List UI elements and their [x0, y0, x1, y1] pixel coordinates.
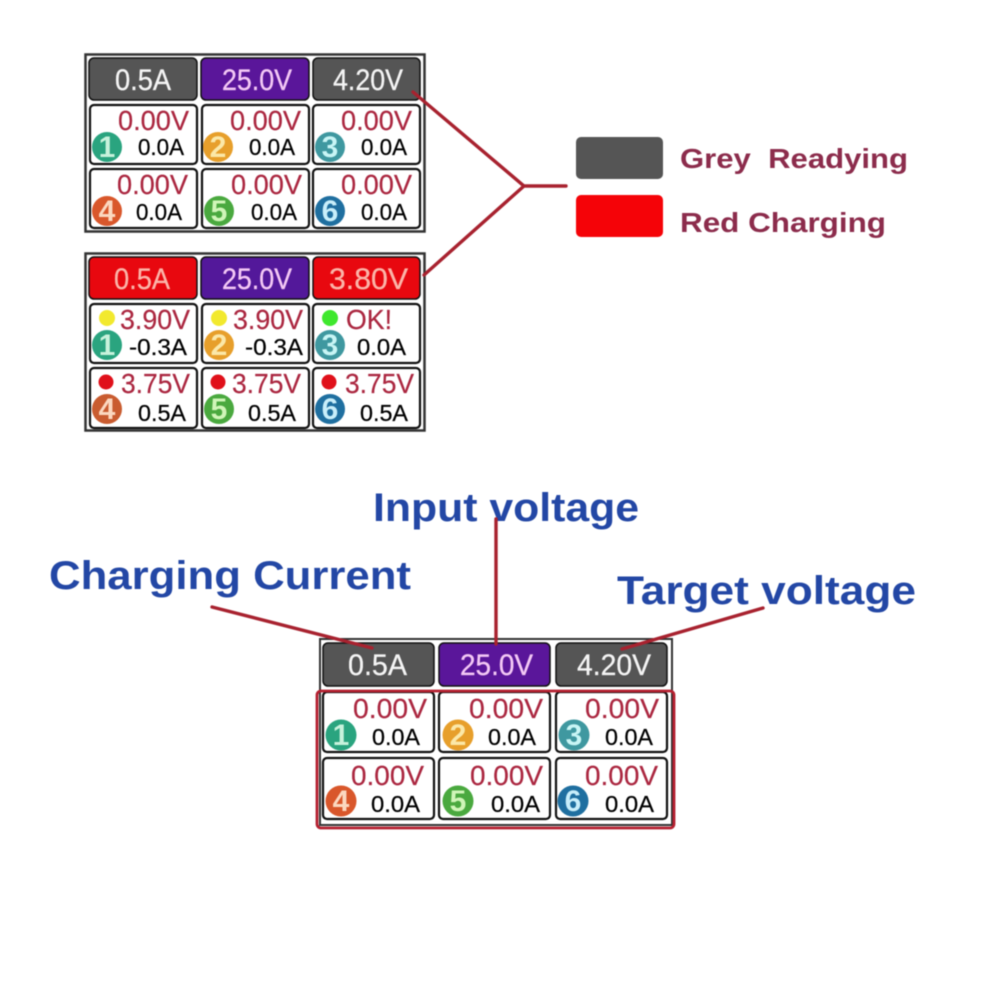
readout: battery voltage, red [313, 257, 420, 299]
readout: input voltage, purple: 25.0V [222, 263, 292, 296]
channel 1: 0.00V [353, 693, 428, 724]
arrow: bracket from both displays to legend [413, 92, 566, 275]
channel 6, red status [313, 368, 420, 428]
channel 3, green status [313, 304, 420, 363]
channel 1 [90, 105, 197, 164]
channel 3: 3 [322, 131, 338, 164]
readout: input voltage: 25.0V [460, 649, 533, 682]
channel 5, red status: 5 [211, 393, 227, 426]
channel 4, red status: 0.5A [138, 400, 186, 426]
readout: charging current, red [89, 257, 197, 299]
channel 6 [556, 758, 667, 819]
readout: charging current [89, 58, 197, 100]
readout: input voltage: 25.0V [222, 64, 292, 97]
channel 4: 4 [99, 195, 116, 228]
channel 2, yellow status: -0.3A [245, 334, 303, 360]
channel 6: 6 [565, 785, 581, 818]
channel 3, green status: 0.0A [357, 334, 406, 360]
panel: charging display [86, 254, 424, 430]
channel 5: 0.0A [251, 199, 297, 225]
readout: charging current: 0.5A [348, 649, 407, 682]
channel 5, red status: 0.5A [248, 400, 296, 426]
legend label: grey readying: Grey Readying [680, 143, 908, 174]
channel 3: 0.0A [605, 724, 653, 750]
readout: input voltage [201, 58, 309, 100]
channel 3 [556, 692, 667, 752]
readout: charging current: 0.5A [115, 64, 171, 97]
heading: target voltage: Target voltage [617, 569, 916, 613]
channel 2: 0.0A [488, 724, 536, 750]
channel 3, green status: OK! [346, 304, 392, 335]
channel 6, red status: 3.75V [345, 368, 415, 399]
arrow: charging current pointer [212, 607, 372, 648]
channel 6: 0.0A [605, 791, 654, 817]
channel 4 [90, 169, 197, 228]
channel 1 [323, 692, 434, 752]
channel 3: 3 [566, 719, 582, 752]
channel 6, red status: 0.5A [360, 400, 408, 426]
channel 6 [313, 169, 420, 228]
readout: input voltage, purple [201, 257, 309, 299]
channel 1: 1 [333, 719, 349, 752]
readout: target voltage [313, 58, 420, 100]
legend label: red charging: Red Charging [680, 207, 886, 238]
legend [576, 137, 908, 238]
legend swatch: grey [576, 137, 663, 179]
channel 5: 0.0A [491, 791, 540, 817]
channel 4: 0.0A [371, 791, 420, 817]
heading: input voltage: Input voltage [373, 486, 639, 530]
channel 6, red status: 6 [322, 393, 338, 426]
channel 5, red status [202, 368, 309, 428]
channel 5 [439, 758, 550, 819]
readout: charging current [323, 643, 434, 686]
channel 5: 5 [211, 195, 227, 228]
channel 3, green status: 3 [322, 329, 338, 362]
channel 3: 0.0A [361, 134, 407, 160]
channel 4, red status: 3.75V [121, 368, 191, 399]
legend swatch: red [576, 195, 663, 237]
channel 3: 0.00V [585, 693, 660, 724]
channel 2, yellow status [202, 304, 309, 363]
channel 4: 0.00V [117, 169, 189, 200]
panel: readying display [86, 54, 424, 232]
arrow: input voltage pointer [494, 519, 498, 644]
channel 1: 0.00V [118, 105, 190, 136]
channel 2 [202, 105, 309, 164]
channel 6: 0.00V [341, 169, 413, 200]
readout: charging current, red: 0.5A [114, 263, 170, 296]
readout: battery voltage, red: 3.80V [329, 263, 408, 296]
channel 4: 0.00V [351, 760, 425, 791]
channel 2: 0.00V [230, 105, 302, 136]
panel: annotated display [317, 639, 674, 828]
channel 4, red status [90, 368, 197, 428]
channel 2: 2 [210, 131, 226, 164]
channel 4: 4 [333, 785, 350, 818]
channel 6: 6 [322, 195, 338, 228]
channel 5 [202, 169, 309, 228]
channel 1: 1 [99, 131, 115, 164]
channel 3 [313, 105, 420, 164]
red outline around channel cells [317, 691, 674, 828]
channel 4: 0.0A [136, 199, 182, 225]
channel 2 [439, 692, 550, 752]
channel 6: 0.00V [585, 760, 659, 791]
channel 1, yellow status: 3.90V [120, 304, 191, 335]
channel 5: 5 [450, 785, 466, 818]
channel 1, yellow status [90, 304, 197, 363]
channel 4 [323, 758, 434, 819]
channel 1: 0.0A [372, 724, 420, 750]
channel 3: 0.00V [341, 105, 413, 136]
channel 2: 0.00V [469, 693, 544, 724]
channel 5: 0.00V [231, 169, 303, 200]
readout: target voltage: 4.20V [333, 64, 403, 97]
channel 2: 0.0A [249, 134, 295, 160]
channel 1, yellow status: -0.3A [129, 334, 187, 360]
readout: target voltage: 4.20V [577, 649, 651, 682]
arrow: target voltage pointer [622, 608, 763, 649]
channel 1, yellow status: 1 [99, 329, 115, 362]
readout: target voltage [556, 643, 667, 686]
channel 1: 0.0A [138, 134, 184, 160]
channel 2: 2 [450, 719, 466, 752]
channel 5, red status: 3.75V [232, 368, 302, 399]
channel 6: 0.0A [361, 199, 407, 225]
channel 2, yellow status: 2 [211, 329, 227, 362]
readout: input voltage [439, 643, 550, 686]
channel 2, yellow status: 3.90V [233, 304, 304, 335]
channel 5: 0.00V [470, 760, 544, 791]
heading: charging current: Charging Current [49, 554, 411, 598]
channel 4, red status: 4 [99, 393, 116, 426]
